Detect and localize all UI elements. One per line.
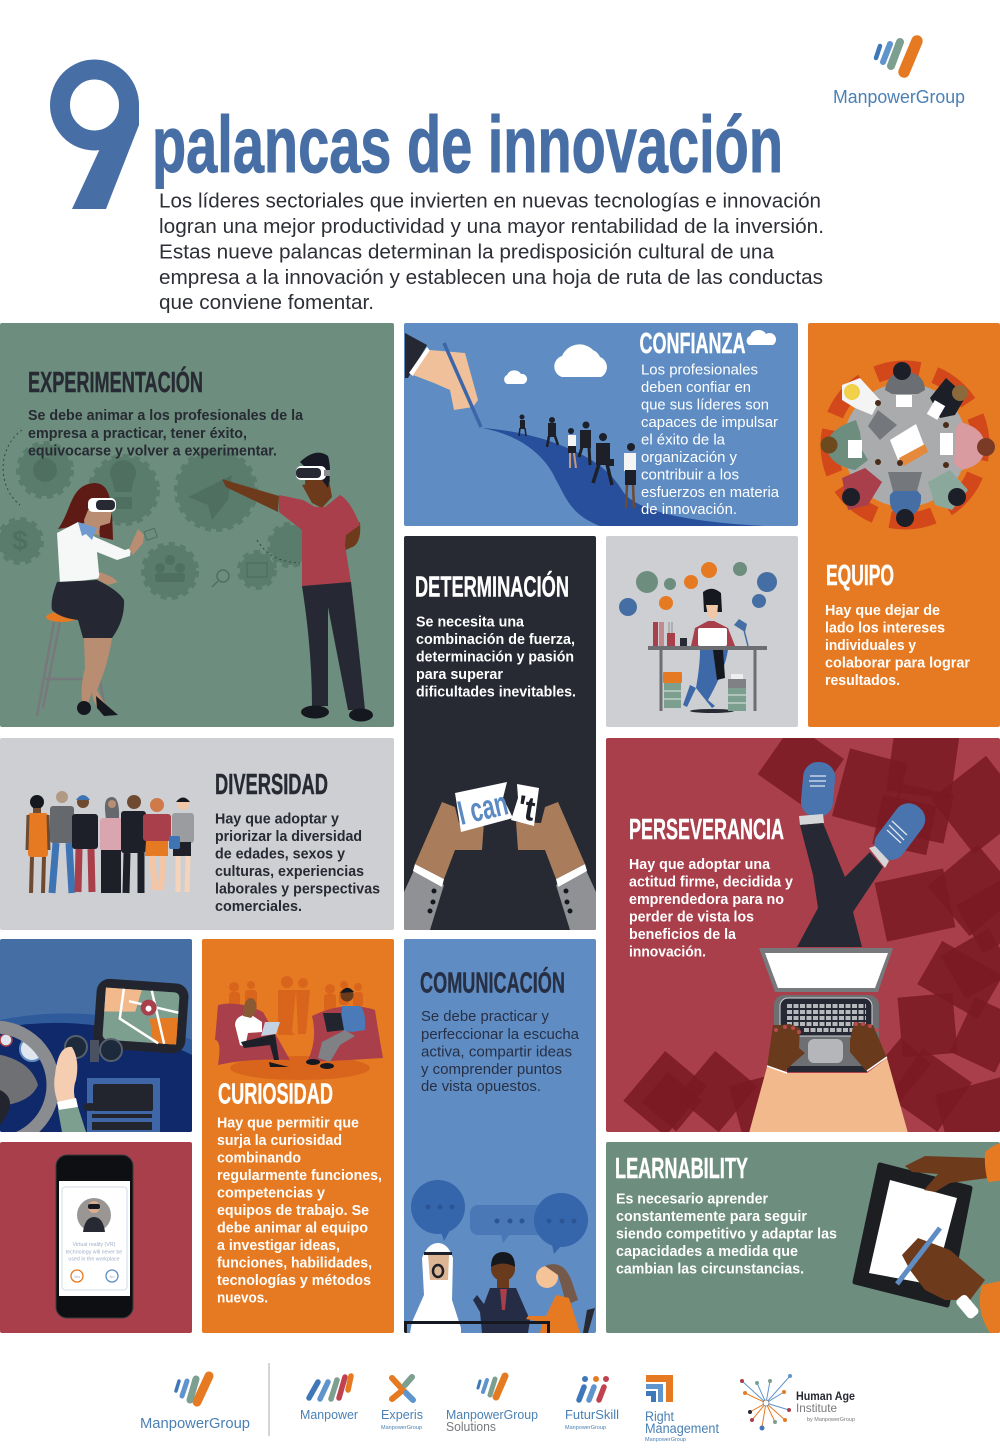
speech bubbles: [411, 1180, 588, 1254]
logo: Human Age Institute: [740, 1374, 855, 1430]
heading: equipo: EQUIPO: [826, 560, 894, 592]
body: confianza: [641, 362, 780, 518]
body: curiosidad: combinando: [217, 1150, 301, 1166]
body: curiosidad: Hay que permitir que: [217, 1116, 359, 1132]
body: perseverancia: perder de vista los: [629, 910, 754, 926]
logo: ManpowerGroup top right: [833, 41, 965, 107]
body: curiosidad: tecnologías y métodos: [217, 1273, 371, 1289]
logo: Right Management: Right: [645, 1409, 674, 1424]
body: equipo: resultados.: [825, 673, 900, 689]
logo: ManpowerGroup Solutions: [446, 1376, 538, 1434]
illustration: person with laptop and legs up: [749, 761, 931, 1133]
heading: learnability: LEARNABILITY: [615, 1153, 748, 1185]
body: confianza: que sus líderes son: [641, 396, 769, 414]
body: learnability: constantemente para seguir: [616, 1209, 807, 1225]
illustration: hands tearing I can't: [404, 782, 596, 930]
body: perseverancia: innovación.: [629, 944, 706, 960]
table items: [848, 395, 953, 491]
logo: ManpowerGroup Solutions: Solutions: [446, 1420, 496, 1434]
body: learnability: cambian las circunstancias.: [616, 1262, 804, 1278]
heading: diversidad: DIVERSIDAD: [215, 769, 328, 801]
body: learnability: [616, 1192, 837, 1278]
body: equipo: Hay que dejar de: [825, 603, 940, 619]
body: diversidad: culturas, experiencias: [215, 864, 364, 880]
intro text: Estas nueve palancas determinan la predisposición cultural de una: [159, 240, 775, 264]
heading: experimentación: EXPERIMENTACIÓN: [28, 365, 203, 399]
body: perseverancia: beneficios de la: [629, 927, 737, 943]
logo: FuturSkill: FuturSkill: [565, 1408, 619, 1422]
walkers: [519, 414, 636, 508]
panel: learnability: [606, 1142, 1000, 1333]
body: determinación: combinación de fuerza,: [416, 632, 575, 648]
clouds: [504, 330, 776, 384]
logo: Human Age Institute: by ManpowerGroup: [807, 1417, 855, 1423]
body: curiosidad: a investigar ideas,: [217, 1238, 340, 1254]
people top view: [820, 362, 995, 527]
body: comunicación: perfeccionar la escucha: [421, 1026, 580, 1043]
phone illustration: [56, 1155, 133, 1318]
body: perseverancia: actitud firme, decidida y: [629, 874, 793, 890]
body: comunicación: activa, compartir ideas: [421, 1044, 572, 1060]
hand with pen: [405, 333, 481, 427]
heading: comunicación: COMUNICACIÓN: [420, 966, 565, 1000]
body: curiosidad: competencias y: [217, 1186, 325, 1202]
footer logos: [140, 1363, 855, 1443]
body: determinación: para superar: [416, 667, 503, 683]
body: experimentación: Se debe animar a los profesionales de la: [28, 408, 304, 424]
body: confianza: contribuir a los: [641, 466, 739, 484]
illustration: diverse group of people: [27, 791, 194, 893]
logo: Manpower: [300, 1376, 358, 1422]
body: equipo: lado los intereses: [825, 620, 945, 636]
body: learnability: siendo competitivo y adaptar las: [616, 1226, 837, 1242]
panel: confianza: [404, 323, 798, 526]
body: curiosidad: surja la curiosidad: [217, 1133, 342, 1149]
panel: diversidad: [0, 738, 394, 930]
body: confianza: deben confiar en: [641, 379, 751, 396]
illustration: woman with VR headset on stool: [37, 483, 157, 717]
panel: perseverancia: [606, 723, 1000, 1148]
body: curiosidad: nuevos.: [217, 1290, 268, 1306]
body: learnability: capacidades a medida que: [616, 1244, 798, 1260]
panel: experimentación: [0, 323, 394, 727]
illustration: three people at a table: [404, 1243, 595, 1333]
heading: confianza: CONFIANZA: [640, 328, 746, 360]
illustration: hands tearing I can't: 't: [515, 788, 538, 829]
body: equipo: [825, 603, 970, 689]
logo: Experis: [381, 1377, 423, 1431]
panel: equipo: [806, 323, 1000, 727]
body: learnability: Es necesario aprender: [616, 1192, 768, 1208]
body: determinación: [416, 614, 576, 700]
road: [482, 428, 765, 526]
logo: FuturSkill: ManpowerGroup: [565, 1425, 606, 1431]
phone illustration: Virtual reality (VR): [73, 1242, 116, 1248]
scattered documents: [623, 723, 1000, 1148]
body: diversidad: [215, 812, 380, 915]
body: perseverancia: emprendedora para no: [629, 892, 784, 908]
body: diversidad: priorizar la diversidad: [215, 829, 362, 845]
logo: Right Management: Management: [645, 1421, 719, 1436]
title: [40, 22, 783, 254]
heading: curiosidad: CURIOSIDAD: [218, 1078, 333, 1110]
illustration: two people on beanbags: [215, 976, 383, 1080]
body: perseverancia: [629, 857, 793, 960]
body: curiosidad: [217, 1116, 382, 1306]
body: comunicación: de vista opuestos.: [421, 1078, 541, 1095]
logo: FuturSkill: [565, 1376, 619, 1431]
body: comunicación: [421, 1008, 580, 1095]
body: confianza: organización y: [641, 449, 737, 466]
body: comunicación: Se debe practicar y: [421, 1008, 549, 1025]
logo: Experis: ManpowerGroup: [381, 1425, 422, 1431]
logo: Manpower: Manpower: [300, 1408, 358, 1422]
body: curiosidad: regularmente funciones,: [217, 1168, 382, 1184]
body: equipo: individuales y: [825, 638, 916, 654]
phone illustration: Yes: [74, 1274, 80, 1279]
phone illustration: No: [109, 1274, 115, 1279]
intro text: empresa a la innovación y establecen una hoja de ruta de las conductas: [159, 266, 823, 289]
logo: ManpowerGroup top right: ManpowerGroup: [833, 87, 965, 107]
body: confianza: de innovación.: [641, 501, 737, 518]
body: equipo: colaborar para lograr: [825, 656, 970, 672]
gears background: [0, 430, 310, 597]
body: curiosidad: equipos de trabajo. Se: [217, 1203, 369, 1219]
intro text: logran una mejor productividad y una mayor rentabilidad de la inversión.: [159, 215, 824, 238]
logo: ManpowerGroup Solutions: ManpowerGroup: [446, 1408, 538, 1422]
big number nine: 9: [50, 22, 139, 254]
body: curiosidad: funciones, habilidades,: [217, 1256, 372, 1272]
logo: Right Management: [645, 1375, 719, 1443]
illustration: man with VR headset: [222, 453, 373, 722]
body: experimentación: [28, 408, 304, 460]
icon circles: [619, 562, 777, 616]
panel: determinación: [404, 536, 596, 930]
body: determinación: Se necesita una: [416, 614, 525, 630]
body: comunicación: y comprender puntos: [421, 1061, 562, 1078]
illustration: hands on tablet: [855, 1143, 1000, 1333]
body: confianza: esfuerzos en materia: [641, 484, 780, 501]
illustration: team around a table: [806, 346, 1000, 544]
logo: Human Age Institute: Institute: [796, 1401, 837, 1415]
body: confianza: el éxito de la: [641, 432, 726, 448]
woman at desk: [648, 589, 767, 713]
gauges and console: [0, 1034, 160, 1132]
phone illustration: used in the workplace: [68, 1256, 120, 1262]
body: confianza: capaces de impulsar: [641, 414, 778, 431]
navigation device: [93, 978, 189, 1054]
intro text: que conviene fomentar.: [159, 291, 374, 314]
panel: comunicación: [404, 939, 596, 1333]
logo: Human Age Institute: Human Age: [796, 1389, 855, 1403]
body: curiosidad: debe animar al equipo: [217, 1220, 368, 1236]
panel: phone poll: [0, 1142, 192, 1333]
body: experimentación: empresa a practicar, tener éxito,: [28, 426, 247, 442]
body: diversidad: laborales y perspectivas: [215, 882, 380, 898]
intro text: [159, 190, 824, 314]
steering wheel and hand: [0, 1027, 86, 1143]
illustration: hands tearing I can't: I can: [454, 785, 512, 833]
body: confianza: Los profesionales: [641, 362, 758, 378]
heading: determinación: DETERMINACIÓN: [415, 570, 569, 604]
body: determinación: dificultades inevitables.: [416, 684, 576, 700]
body: determinación: determinación y pasión: [416, 650, 574, 666]
logo: Experis: Experis: [381, 1408, 423, 1422]
logo: Right Management: ManpowerGroup: [645, 1437, 686, 1443]
body: diversidad: comerciales.: [215, 899, 302, 915]
body: diversidad: de edades, sexos y: [215, 846, 345, 862]
panel: car dashboard navigation: [0, 939, 192, 1143]
panel: curiosidad: [202, 939, 394, 1333]
logo: ManpowerGroup footer: ManpowerGroup: [140, 1415, 250, 1432]
heading: perseverancia: PERSEVERANCIA: [629, 814, 784, 846]
intro text: Los líderes sectoriales que invierten en nuevas tecnologías e innovación: [159, 190, 821, 212]
logo: ManpowerGroup footer: [140, 1376, 250, 1432]
panel: desk illustration: [606, 536, 798, 727]
body: perseverancia: Hay que adoptar una: [629, 857, 771, 873]
gears background: $: [12, 525, 28, 556]
body: experimentación: equivocarse y volver a experimentar.: [28, 444, 277, 460]
body: diversidad: Hay que adoptar y: [215, 812, 339, 828]
phone illustration: technology will never be: [66, 1250, 122, 1256]
